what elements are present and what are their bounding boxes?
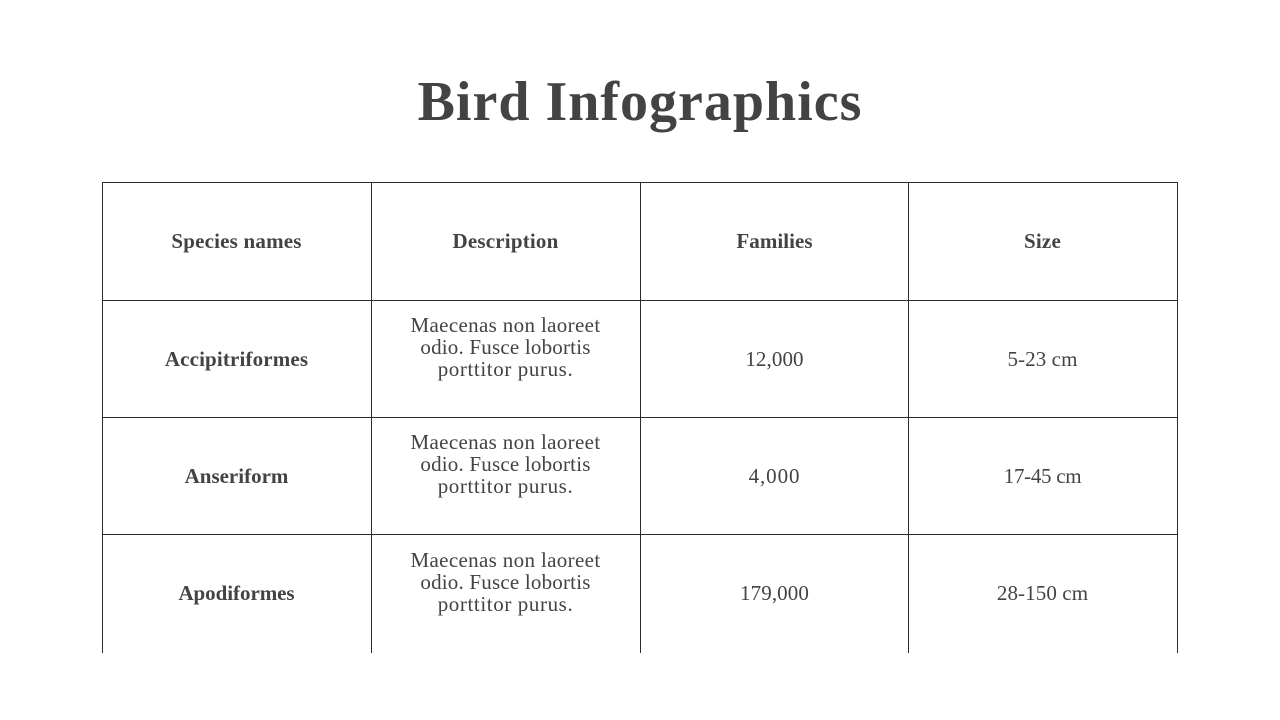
row 1 species: Accipitriformes: [165, 347, 308, 371]
row 3 species: Apodiformes: [178, 581, 295, 605]
row 2 description: Maecenas non laoreet: [410, 430, 601, 454]
table: [102, 182, 1178, 653]
title: Bird Infographics: [418, 71, 862, 133]
row 3 description: [410, 548, 601, 616]
row 3 size: 28-150 cm: [997, 581, 1088, 605]
row 2 families: 4,000: [749, 464, 800, 488]
header: families: Families: [736, 229, 813, 253]
row 3 description: odio. Fusce lobortis: [420, 570, 591, 594]
row 2 size: 17-45 cm: [1004, 464, 1081, 488]
row 1 description: [410, 313, 601, 381]
row 1 description: porttitor purus.: [438, 357, 573, 381]
header: size: Size: [1024, 229, 1061, 253]
row 1 size: 5-23 cm: [1007, 347, 1078, 371]
row 3 description: Maecenas non laoreet: [410, 548, 601, 572]
header: description: Description: [452, 229, 559, 253]
row 1 description: odio. Fusce lobortis: [420, 335, 591, 359]
row 2 description: porttitor purus.: [438, 474, 573, 498]
row 2 description: odio. Fusce lobortis: [420, 452, 591, 476]
row 1 description: Maecenas non laoreet: [410, 313, 601, 337]
row 3 families: 179,000: [740, 581, 809, 605]
row 2 description: [410, 430, 601, 498]
header: species names: Species names: [171, 229, 302, 253]
row 3 description: porttitor purus.: [438, 592, 573, 616]
row 1 families: 12,000: [745, 347, 804, 371]
row 2 species: Anseriform: [185, 464, 288, 488]
